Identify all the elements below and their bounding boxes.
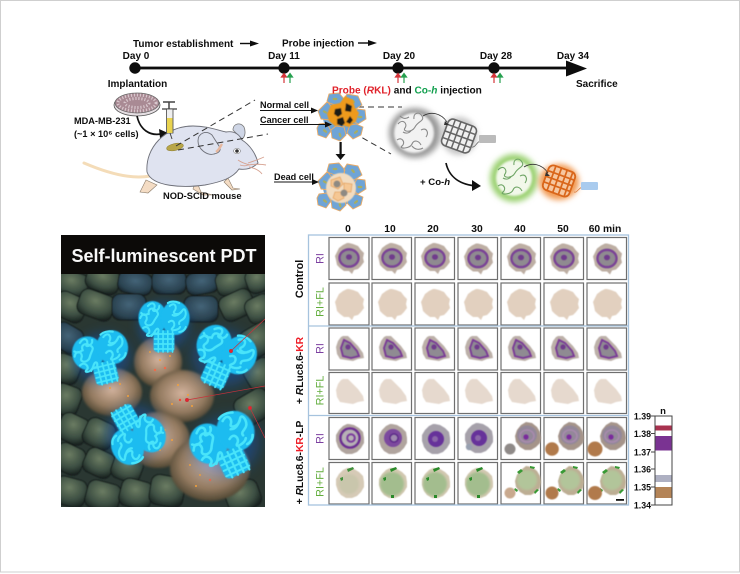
body: [147, 126, 258, 186]
day markers: [129, 62, 500, 74]
tick labels: 1.36: [634, 464, 651, 474]
time point column labels: 30: [471, 224, 483, 235]
day labels: Day 0: [123, 51, 150, 62]
time point column labels: [345, 224, 621, 235]
experiment timeline: [108, 38, 618, 90]
tail: [84, 163, 150, 177]
normal cell label: [260, 100, 318, 114]
implantation label: Implantation: [108, 79, 167, 90]
tick marks: [651, 416, 655, 505]
phase label: tumor establishment: Tumor establishment: [133, 39, 234, 50]
panel: self-luminescent PDT cover image: [61, 235, 265, 507]
cell line label: (~1 × 10⁶ cells): [74, 129, 139, 139]
row: KR-LP RI: RI: [314, 433, 326, 444]
panel: RLuc8.6-KR group: [295, 328, 626, 414]
probe and cofactor heading: Probe (RKL) and Co-h injection: [332, 86, 482, 96]
protein: activated green and orange probe: [490, 154, 598, 202]
cell line label: MDA-MB-231: [74, 116, 131, 126]
syringe: [162, 102, 177, 139]
mouse label: NOD-SCID mouse: [163, 191, 242, 201]
curved arrow plus Co-h: [420, 163, 481, 191]
tick labels: 1.38: [634, 429, 651, 439]
control label: Control: [294, 260, 306, 298]
ear: [198, 133, 220, 154]
day labels: Day 28: [480, 51, 513, 62]
tick labels: [634, 412, 651, 510]
day labels: Day 34: [557, 51, 590, 62]
protein: gray inactive probe: [389, 108, 496, 158]
row: control RI: RI: [314, 253, 326, 264]
curved arrow to syringe: [137, 116, 168, 138]
day labels: Day 11: [268, 51, 300, 62]
RLuc8.6-KR-LP label: + RLuc8.6-KR-LP: [295, 420, 306, 504]
tick labels: 1.37: [634, 448, 651, 458]
mouse illustration: [84, 124, 266, 195]
n label: n: [660, 406, 666, 417]
far ear: [233, 124, 245, 139]
row: KR RI: RI: [314, 343, 326, 354]
time point column labels: 40: [514, 224, 526, 235]
normal cell cancer cell cluster: [317, 93, 366, 141]
dead cell label: [274, 172, 319, 185]
feet: [140, 178, 240, 195]
day labels: [123, 51, 590, 62]
petri dish: [114, 93, 160, 116]
time point column labels: 10: [384, 224, 396, 235]
whiskers: [238, 157, 266, 174]
panel: Control group: [294, 238, 626, 325]
cancer cell label: Cancer cell: [260, 115, 309, 125]
sacrifice label: Sacrifice: [576, 79, 618, 90]
tick labels: 1.35: [634, 482, 651, 492]
tick labels: 1.39: [634, 412, 651, 422]
dashed zoom lines: [176, 100, 402, 154]
refractive index colour scale: [634, 406, 672, 510]
timeline arrowhead: [566, 60, 587, 76]
proteins: [138, 301, 190, 352]
tick labels: 1.34: [634, 500, 651, 510]
dead cell label: Dead cell: [274, 172, 314, 182]
time point column labels: 60 min: [589, 224, 621, 235]
row: KR-LP RI+FL: RI+FL: [314, 467, 326, 497]
arrow normal to dead: [336, 142, 346, 160]
row: control RI: [314, 238, 626, 280]
time point column labels: 20: [427, 224, 439, 235]
tumor site: [166, 142, 184, 152]
panel outlines: [308, 235, 628, 505]
scale texture: [61, 274, 265, 507]
scale bar: [616, 499, 624, 501]
row: control RI+FL: [314, 283, 626, 325]
row: KR-LP RI: [314, 418, 626, 460]
eye: [234, 148, 240, 154]
RLuc8.6-KR label: + RLuc8.6-KR: [295, 336, 306, 404]
fluorescent dots: [99, 351, 211, 487]
day labels: Day 20: [383, 51, 416, 62]
cover title bar: Self-luminescent PDT: [71, 246, 257, 266]
bulbs: [82, 337, 250, 501]
row: control RI+FL: RI+FL: [314, 287, 326, 317]
cell line label: [74, 116, 139, 139]
curved arrow plus Co-h: + Co-h: [420, 177, 450, 188]
row: KR-LP RI+FL: [314, 462, 626, 504]
phase label: probe injection: Probe injection: [282, 38, 354, 50]
time point column labels: 0: [345, 224, 351, 235]
dead cell cluster: [317, 163, 366, 211]
panel: RLuc8.6-KR-LP group: [295, 418, 626, 504]
injection arrows: [282, 74, 502, 83]
normal cell label: Normal cell: [260, 100, 309, 110]
laser lines: [185, 319, 265, 438]
cover title bar: [61, 235, 265, 274]
time point column labels: 50: [557, 224, 569, 235]
row: KR RI+FL: [314, 372, 626, 414]
colour bands: [655, 416, 672, 505]
cancer cell label: [260, 115, 332, 128]
row: KR RI: [314, 328, 626, 370]
row: KR RI+FL: RI+FL: [314, 376, 326, 405]
